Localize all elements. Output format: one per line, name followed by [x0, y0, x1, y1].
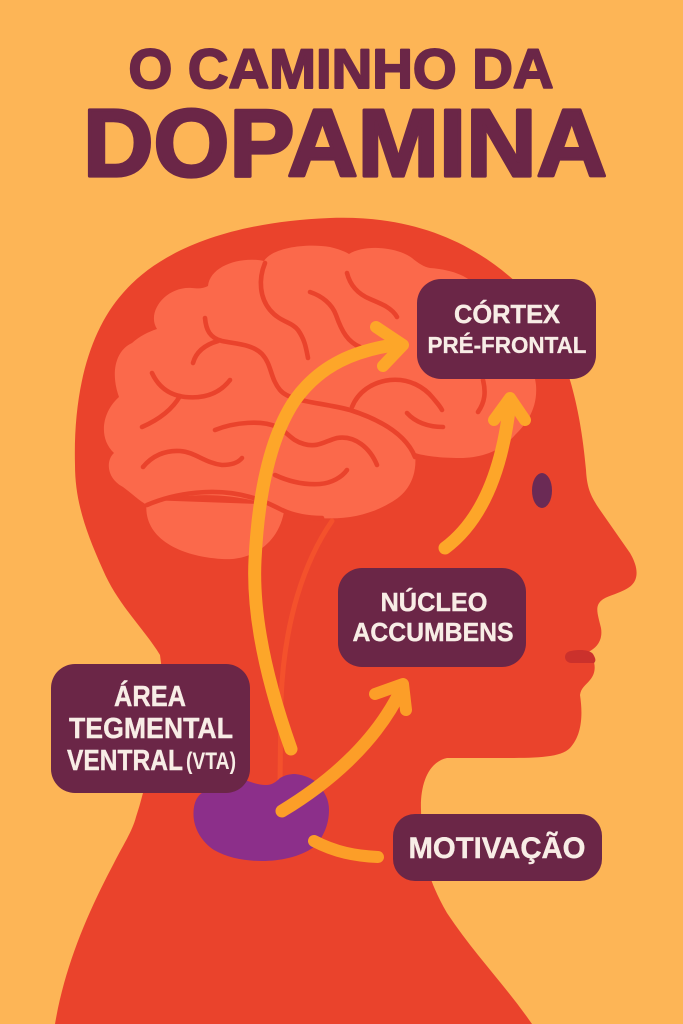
cerebellum — [146, 500, 285, 559]
label: cortex: CÓRTEX — [454, 299, 561, 329]
label: VTA: (VTA) — [186, 748, 236, 775]
label: cortex: PRÉ-FRONTAL — [428, 331, 586, 358]
label: motivation — [393, 814, 602, 881]
label: cortex — [417, 279, 596, 379]
head silhouette — [55, 218, 637, 1024]
label: VTA: ÁREA — [114, 679, 186, 713]
label: VTA — [51, 664, 250, 793]
label: VTA: VENTRAL — [67, 745, 183, 777]
mouth — [565, 650, 595, 663]
arrow: VTA to cortex — [255, 327, 403, 749]
brain — [104, 246, 536, 559]
label: nucleus accumbens — [338, 568, 526, 667]
arrow: nucleus accumbens to cortex — [445, 398, 525, 548]
brain folds — [142, 263, 485, 518]
title — [83, 37, 607, 197]
title: DOPAMINA — [83, 90, 607, 197]
thin red pathway — [280, 521, 332, 784]
arrow: VTA to nucleus accumbens — [282, 684, 406, 811]
label: nucleus accumbens: ACCUMBENS — [352, 617, 514, 647]
connector: VTA to motivation — [314, 841, 378, 857]
title: O CAMINHO DA — [128, 37, 554, 100]
cerebrum — [104, 246, 536, 518]
eye — [532, 473, 552, 508]
label: VTA: TEGMENTAL — [69, 713, 233, 745]
label: motivation: MOTIVAÇÃO — [408, 831, 586, 865]
VTA blob — [193, 774, 329, 861]
label: nucleus accumbens: NÚCLEO — [380, 587, 488, 617]
